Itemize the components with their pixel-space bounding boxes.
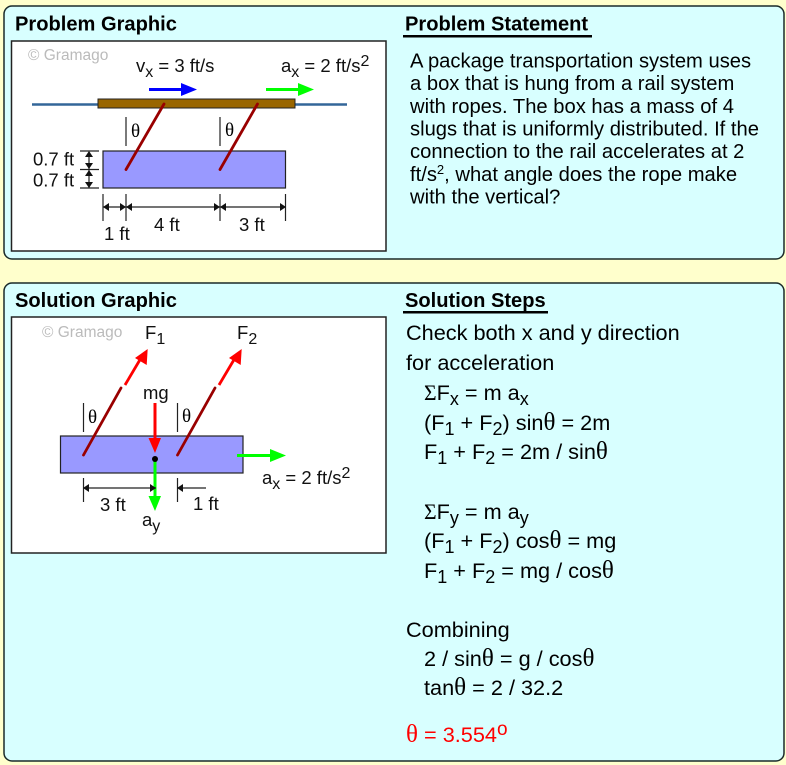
x direction equations: ΣF (424, 380, 450, 405)
answer: o (497, 719, 508, 740)
combining equations: 2 / sin (424, 646, 482, 671)
trolley (98, 99, 295, 108)
combining equations: θ = 2 / 32.2 (454, 674, 563, 701)
y direction equations: F (424, 558, 437, 583)
label: velocity: v (136, 55, 145, 76)
heading: solution graphic: Solution Graphic (15, 290, 177, 312)
y direction equations: ) cos (502, 528, 550, 553)
dimensions: 1 ft (193, 493, 219, 514)
dimensions (83, 478, 219, 515)
heading: solution steps: Solution Steps (405, 290, 546, 312)
label: F2: 2 (248, 331, 257, 348)
x direction equations: + F (447, 439, 485, 464)
solution steps text (406, 320, 680, 748)
width dimensions: 3 ft (239, 214, 265, 235)
answer: θ (406, 721, 418, 748)
height dimensions: 0.7 ft (33, 170, 74, 190)
height dimensions: 0.7 ft (33, 148, 74, 170)
x direction equations: ) sin (502, 410, 543, 435)
problem statement text: slugs that is uniformly distributed. If the (410, 118, 759, 140)
arrow: y acceleration (148, 459, 161, 511)
problem statement text: with the vertical? (409, 186, 560, 208)
label: F1: 1 (156, 331, 165, 348)
width dimensions (103, 194, 286, 244)
force arrow F2 (178, 349, 242, 455)
x direction equations: x (520, 389, 529, 409)
problem statement text: ft/s (410, 164, 437, 186)
x direction equations: = 2m / sin (495, 439, 596, 464)
angle markers: θ (88, 407, 97, 428)
answer: = 3.554 (418, 722, 497, 747)
rail (32, 103, 347, 106)
label: acceleration: = 2 ft/s (299, 55, 360, 76)
label: mg: mg (143, 382, 169, 403)
problem statement text: connection to the rail accelerates at 2 (410, 141, 744, 163)
box (60, 436, 243, 473)
label: velocity: = 3 ft/s (153, 55, 214, 76)
problem statement text: , what angle does the rope make (444, 164, 737, 186)
dimensions: 3 ft (100, 494, 126, 515)
x direction equations: 2 (492, 419, 502, 439)
ropes (126, 104, 258, 170)
problem statement text: A package transportation system uses (410, 50, 751, 72)
intro: Check both x and y direction (406, 320, 680, 345)
combining equations: tan (424, 675, 454, 700)
angle markers: θ (131, 121, 140, 142)
problem statement text: with ropes. The box has a mass of 4 (409, 96, 734, 118)
problem statement text: 2 (437, 162, 444, 177)
watermark: © Gramago (28, 47, 108, 64)
y direction equations: + F (454, 528, 492, 553)
x direction equations: + F (454, 410, 492, 435)
label: acceleration: a (281, 55, 291, 76)
label: F2: F (237, 322, 248, 343)
y direction equations: 1 (437, 567, 447, 587)
y direction equations: y (520, 508, 529, 528)
y direction equations: (F (424, 528, 444, 553)
label: ax: 2 (341, 465, 350, 482)
label: ay: y (152, 518, 160, 535)
arrow: acceleration (266, 83, 314, 96)
problem graphic diagram (12, 41, 386, 251)
heading: problem statement: Problem Statement (405, 14, 588, 36)
angle markers: θ (225, 120, 234, 141)
x direction equations: 1 (444, 419, 454, 439)
x direction equations: = m a (459, 380, 521, 405)
combining equations: Combining (406, 617, 510, 642)
x direction equations: F (424, 439, 437, 464)
label: acceleration: x (291, 64, 299, 81)
y direction equations: = mg / cos (495, 558, 602, 583)
box (103, 151, 286, 188)
center point (152, 456, 158, 462)
force arrow F1 (84, 349, 148, 455)
y direction equations: ΣF (424, 499, 450, 524)
y direction equations: θ (602, 557, 614, 584)
width dimensions: 4 ft (154, 214, 180, 235)
panel: problem (4, 6, 784, 259)
label: ax: a (262, 467, 272, 488)
label: velocity: x (145, 64, 153, 81)
y direction equations: 2 (485, 567, 495, 587)
label: ax: = 2 ft/s (280, 467, 341, 488)
label: ay: a (142, 509, 152, 530)
x direction equations: 1 (437, 448, 447, 468)
arrow: velocity (149, 83, 197, 96)
label: F1: F (145, 322, 156, 343)
x direction equations: 2 (485, 448, 495, 468)
arrow: weight (148, 403, 161, 453)
arrow: x acceleration (237, 449, 286, 462)
solution graphic diagram (12, 317, 386, 553)
angle markers (126, 117, 234, 146)
x direction equations: θ = 2m (543, 409, 610, 436)
intro: for acceleration (406, 350, 554, 375)
x direction equations: x (450, 389, 459, 409)
label: ax: x (272, 476, 280, 493)
x direction equations: (F (424, 410, 444, 435)
y direction equations: 2 (492, 537, 502, 557)
combining equations: θ = g / cosθ (482, 645, 594, 672)
y direction equations: + F (447, 558, 485, 583)
width dimensions: 1 ft (104, 223, 130, 244)
angle markers (84, 403, 191, 432)
label: acceleration: 2 (360, 53, 369, 70)
height dimensions (33, 148, 99, 190)
y direction equations: θ = mg (549, 527, 616, 554)
x direction equations: θ (596, 438, 608, 465)
y direction equations: 1 (444, 537, 454, 557)
y direction equations: = m a (459, 499, 521, 524)
angle markers: θ (182, 406, 191, 427)
heading: problem graphic: Problem Graphic (15, 14, 177, 36)
y direction equations: y (450, 508, 459, 528)
panel: solution (4, 283, 784, 761)
watermark: © Gramago (42, 324, 122, 341)
problem statement text: a box that is hung from a rail system (410, 73, 734, 95)
